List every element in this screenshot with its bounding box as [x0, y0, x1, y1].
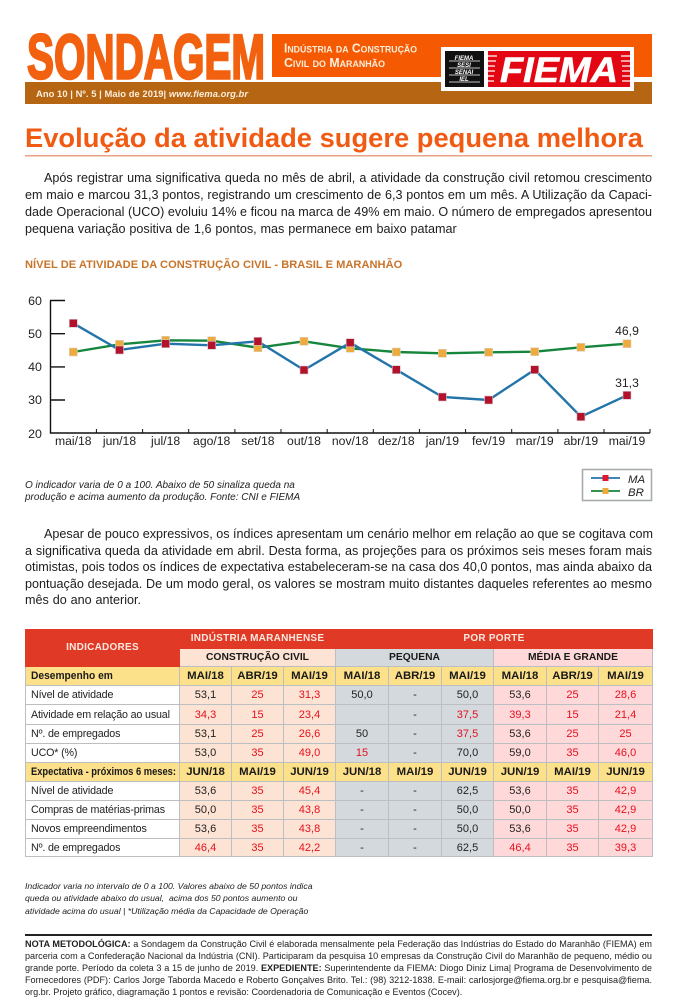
section row: expectativa: Expectativa - próximos 6 meses:: [31, 766, 176, 778]
x axis labels: jun/18: [102, 434, 136, 448]
section row: desempenho: MAI/19: [607, 670, 644, 682]
methodological note: NOTA METODOLÓGICA: a Sondagem da Construção Civil é elaborada mensalmente pela Federação das Indústrias do Estado do Maranhão (FIEMA) em: [25, 939, 652, 949]
row: nível de atividade (expectativa): [31, 782, 652, 800]
intro paragraph: Após registrar uma significativa queda no mês de abril, a atividade da construção civil retomou crescimento: [44, 171, 652, 185]
row: UCO: 35: [251, 747, 264, 759]
table header: sectors: [180, 649, 652, 666]
row: atividade em relação ao usual: Atividade em relação ao usual: [31, 708, 170, 720]
row: empregados: 25: [251, 728, 264, 740]
edition line: Ano 10 | Nº. 5 | Maio de 2019| www.fiema.org.br: [36, 88, 249, 99]
row: empregados: Nº. de empregados: [31, 728, 120, 740]
row: nível de atividade: -: [413, 689, 417, 701]
header banner: [25, 22, 652, 104]
section row: desempenho: MAI/18: [187, 670, 224, 682]
section row: desempenho: Desempenho em: [31, 670, 113, 682]
x axis labels: nov/18: [332, 434, 369, 448]
row: nível de atividade: 28,6: [615, 689, 636, 701]
row: empregados (expectativa): -: [413, 842, 417, 854]
logo: FIEMA: [441, 47, 634, 91]
row: compras: 42,9: [615, 804, 636, 816]
row: novos empreendimentos: -: [413, 823, 417, 835]
row: atividade em relação ao usual: 21,4: [615, 708, 636, 720]
data table: indicadores: [25, 629, 653, 857]
main heading: Evolução da atividade sugere pequena melhora: [25, 123, 644, 153]
methodological note: [25, 934, 652, 997]
logo: FIEMA: FIEMA: [500, 51, 618, 90]
row: nível de atividade (expectativa): 35: [251, 785, 264, 797]
x axis labels: mar/19: [516, 434, 554, 448]
row: UCO: 53,0: [195, 747, 216, 759]
x axis labels: jan/19: [425, 434, 459, 448]
axes: [50, 300, 650, 433]
table note: atividade acima do usual | *Utilização média da Capacidade de Operação: [25, 906, 308, 916]
table header: groups: INDICADORES: [66, 642, 139, 653]
row: nível de atividade: 53,1: [195, 689, 216, 701]
row: empregados: 50: [356, 728, 368, 740]
row: nível de atividade: Nível de atividade: [31, 689, 113, 701]
y axis labels: 30: [28, 393, 42, 407]
band subtitle: Indústria da Construção: [284, 42, 417, 56]
intro paragraph: [25, 171, 652, 236]
brown edition band: [25, 82, 652, 104]
row: nível de atividade (expectativa): 53,6: [509, 785, 531, 797]
section row: expectativa: MAI/19: [239, 766, 276, 778]
y axis labels: 50: [28, 327, 42, 341]
x axis labels: ago/18: [193, 434, 231, 448]
table note: queda ou atividade abaixo do usual, acima dos 50 pontos aumento ou: [25, 893, 297, 903]
section row: desempenho: [26, 667, 652, 685]
table note: Indicador varia no intervalo de 0 a 100. Valores abaixo de 50 pontos indica: [25, 881, 313, 891]
row: UCO: 59,0: [509, 747, 531, 759]
row: UCO: UCO* (%): [31, 747, 77, 759]
section row: desempenho: MAI/18: [344, 670, 380, 682]
line chart: atividade MA vs BR: [28, 294, 650, 448]
wordmark: SONDAGEM: SONDAGEM: [27, 22, 265, 92]
row: empregados: 53,1: [195, 728, 216, 740]
row: UCO: 15: [356, 747, 368, 759]
x axis labels: fev/19: [472, 434, 505, 448]
y axis labels: [28, 294, 42, 441]
methodological note: Fornecedores (PDF): Carlos Jorge Taborda Macedo e Roberto Gonçalves Brito. Tel.: (98) 3212-1838. E-mail: carlosjorge@fiema.org.br e pesquisa@fiema.: [25, 975, 652, 985]
intro paragraph: em maio e marcou 31,3 pontos, registrando um crescimento de 6,3 pontos em um mês. A Utilização da Capaci-: [25, 188, 652, 202]
row: UCO: 70,0: [457, 747, 478, 759]
row: compras: 50,0: [195, 804, 216, 816]
row: atividade em relação ao usual: [31, 705, 652, 724]
intro paragraph: pequena variação positiva de 1,6 pontos, mas permanece em baixo patamar: [25, 222, 457, 236]
row: empregados (expectativa): -: [360, 842, 364, 854]
row: nível de atividade: 31,3: [299, 689, 320, 701]
row: atividade em relação ao usual: 34,3: [195, 708, 216, 720]
x axis labels: dez/18: [378, 434, 415, 448]
row: atividade em relação ao usual: 15: [251, 708, 264, 720]
x axis labels: mai/19: [609, 434, 646, 448]
row: nível de atividade: 25: [566, 689, 579, 701]
chart note: [24, 480, 300, 503]
section row: desempenho: MAI/18: [502, 670, 538, 682]
row: empregados: 53,6: [509, 728, 531, 740]
table header: groups: [26, 630, 652, 856]
row: compras: -: [413, 804, 417, 816]
row: nível de atividade: [31, 686, 652, 704]
section row: desempenho: MAI/19: [291, 670, 328, 682]
x axis labels: set/18: [241, 434, 275, 448]
second paragraph: Apesar de pouco expressivos, os índices apresentam um cenário melhor em relação ao que se cogitava com: [44, 527, 653, 541]
legend: MA: [628, 474, 645, 486]
row: compras: [31, 801, 652, 819]
chart heading: NÍVEL DE ATIVIDADE DA CONSTRUÇÃO CIVIL - BRASIL E MARANHÃO: [25, 259, 402, 271]
row: empregados: -: [413, 728, 417, 740]
section row: expectativa: MAI/19: [554, 766, 591, 778]
row: empregados (expectativa): 46,4: [195, 842, 216, 854]
series MA: [69, 319, 631, 421]
row: nível de atividade (expectativa): 42,9: [615, 785, 636, 797]
row: empregados (expectativa): 46,4: [509, 842, 531, 854]
row: nível de atividade: 25: [251, 689, 264, 701]
row: empregados: 25: [566, 728, 579, 740]
legend: BR: [628, 487, 644, 499]
row: UCO: 46,0: [615, 747, 636, 759]
row: nível de atividade (expectativa): -: [413, 785, 417, 797]
row: novos empreendimentos: 42,9: [615, 823, 636, 835]
row: atividade em relação ao usual: 39,3: [509, 708, 531, 720]
section row: desempenho: MAI/19: [449, 670, 486, 682]
row: compras: 50,0: [457, 804, 478, 816]
y axis labels: 60: [28, 294, 42, 308]
row: empregados (expectativa): [31, 839, 652, 856]
row: nível de atividade: 50,0: [457, 689, 478, 701]
methodological note: parceria com a Confederação Nacional da Indústria (CNI). Participaram da pesquisa 10 empresas da Construção Civil do Maranhão de pequeno, médio ou: [25, 951, 652, 961]
x axis labels: abr/19: [564, 434, 598, 448]
row: UCO: [31, 744, 652, 762]
second paragraph: [25, 527, 653, 607]
y axis labels: 40: [28, 360, 42, 374]
row: empregados (expectativa): 42,2: [299, 842, 320, 854]
orange title band: [272, 34, 652, 77]
section row: expectativa: MAI/19: [397, 766, 433, 778]
section row: expectativa: JUN/19: [606, 766, 645, 778]
row: atividade em relação ao usual: 23,4: [299, 708, 320, 720]
x axis labels: out/18: [287, 434, 321, 448]
value labels: [615, 324, 639, 390]
table header: sectors: MÉDIA E GRANDE: [528, 652, 618, 662]
row: novos empreendimentos: 53,6: [509, 823, 531, 835]
methodological note: org.br. Projeto gráfico, diagramação 1 pontos e revisão: Coordenadoria de Comunicação e Eventos (Cocev).: [25, 987, 462, 997]
row: nível de atividade (expectativa): 53,6: [195, 785, 216, 797]
row: compras: 50,0: [509, 804, 531, 816]
table header: sectors: CONSTRUÇÃO CIVIL: [206, 652, 309, 662]
row: nível de atividade (expectativa): 45,4: [299, 785, 320, 797]
second paragraph: otimistas, pois todos os índices de expectativa estabeleceram-se na casa dos 40,0 pontos, mas ainda abaixo da: [25, 560, 652, 574]
section row: expectativa: JUN/19: [290, 766, 329, 778]
row: nível de atividade: 53,6: [509, 689, 531, 701]
row: compras: 35: [251, 804, 264, 816]
section row: desempenho: ABR/19: [237, 670, 278, 682]
section row: expectativa: JUN/18: [186, 766, 225, 778]
table note: [25, 881, 313, 916]
logo: FIEMA: FIEMA: [455, 56, 473, 62]
row: empregados: 37,5: [457, 728, 478, 740]
row: novos empreendimentos: 50,0: [457, 823, 478, 835]
x axis labels: jul/18: [150, 434, 180, 448]
row: novos empreendimentos: 35: [566, 823, 579, 835]
series BR: [69, 336, 631, 357]
x axis labels: [55, 434, 646, 448]
row: nível de atividade (expectativa): 35: [566, 785, 579, 797]
y axis labels: 20: [28, 427, 42, 441]
row: novos empreendimentos: 43,8: [299, 823, 320, 835]
section row: expectativa: JUN/19: [448, 766, 487, 778]
value labels: 31,3: [615, 376, 639, 390]
legend: [582, 468, 652, 502]
row: compras: 35: [566, 804, 579, 816]
row: empregados (expectativa): Nº. de empregados: [31, 842, 120, 854]
section row: desempenho: ABR/19: [552, 670, 593, 682]
chart note: produção e acima aumento da produção. Fonte: CNI e FIEMA: [25, 492, 300, 503]
section row: expectativa: JUN/19: [501, 766, 539, 778]
row: empregados: 25: [619, 728, 632, 740]
table header: groups: POR PORTE: [463, 633, 525, 644]
row: empregados: [31, 725, 652, 743]
logo: FIEMA: SENAI: [455, 70, 473, 76]
band subtitle: [284, 42, 417, 70]
band subtitle: Civil do Maranhão: [284, 56, 385, 70]
row: compras: -: [360, 804, 364, 816]
row: novos empreendimentos: Novos empreendimentos: [31, 823, 147, 835]
x axis labels: mai/18: [55, 434, 92, 448]
section row: expectativa: JUN/18: [343, 766, 381, 778]
logo: FIEMA: SESI: [457, 63, 471, 69]
row: empregados: 26,6: [299, 728, 320, 740]
row: nível de atividade: 50,0: [351, 689, 373, 701]
row: nível de atividade (expectativa): -: [360, 785, 364, 797]
row: UCO: 49,0: [299, 747, 320, 759]
row: compras: 43,8: [299, 804, 320, 816]
methodological note: grande porte. Período da coleta 3 a 15 de junho de 2019. EXPEDIENTE: Superintendente da FIEMA: Diogo Diniz Lima| Programa de Desenvolvimento de: [25, 963, 652, 973]
row: compras: Compras de matérias-primas: [31, 804, 165, 816]
row: nível de atividade (expectativa): Nível de atividade: [31, 785, 113, 797]
row: novos empreendimentos: [31, 820, 652, 838]
section row: expectativa: [26, 763, 652, 781]
row: novos empreendimentos: -: [360, 823, 364, 835]
row: atividade em relação ao usual: 37,5: [457, 708, 478, 720]
row: empregados (expectativa): 35: [251, 842, 264, 854]
row: empregados (expectativa): 39,3: [615, 842, 636, 854]
row: nível de atividade (expectativa): 62,5: [457, 785, 478, 797]
logo: FIEMA: IEL: [459, 77, 469, 83]
row: atividade em relação ao usual: -: [413, 708, 417, 720]
row: empregados (expectativa): 62,5: [457, 842, 478, 854]
row: empregados (expectativa): 35: [566, 842, 579, 854]
section row: desempenho: ABR/19: [395, 670, 435, 682]
row: atividade em relação ao usual: 15: [566, 708, 579, 720]
value labels: 46,9: [615, 324, 639, 338]
table header: groups: INDÚSTRIA MARANHENSE: [191, 633, 324, 644]
second paragraph: a significativa queda da atividade em abril. Desta forma, as projeções para os próximos seis meses foram mais: [25, 544, 652, 558]
second paragraph: mês do ano anterior.: [25, 593, 141, 607]
chart note: O indicador varia de 0 a 100. Abaixo de 50 sinaliza queda na: [25, 480, 295, 491]
row: UCO: 35: [566, 747, 579, 759]
intro paragraph: dade Operacional (UCO) evoluiu 14% e ficou na marca de 49% em maio. O número de empregados apresentou: [25, 205, 652, 219]
second paragraph: pontuação desejada. De um modo geral, os valores se mostram muito distantes daqueles referentes ao mesmo: [25, 577, 652, 591]
row: novos empreendimentos: 35: [251, 823, 264, 835]
row: UCO: -: [413, 747, 417, 759]
table header: sectors: PEQUENA: [389, 652, 440, 662]
row: novos empreendimentos: 53,6: [195, 823, 216, 835]
